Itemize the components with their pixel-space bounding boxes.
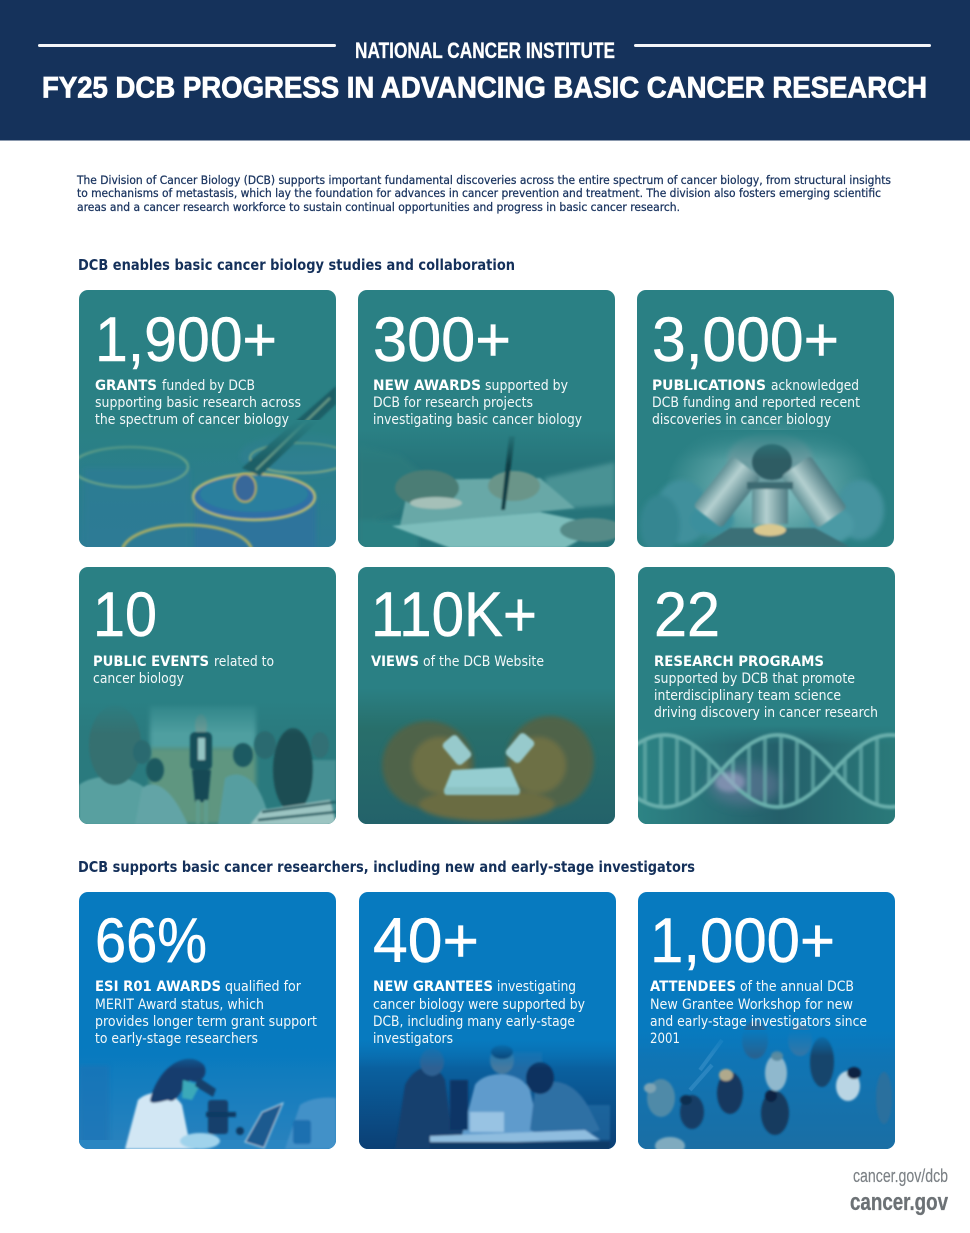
description: driving discovery in cancer research bbox=[654, 705, 878, 721]
description: PUBLICATIONS bbox=[652, 378, 766, 394]
description: to early-stage researchers bbox=[95, 1031, 258, 1047]
card background bbox=[637, 290, 894, 547]
description: NEW AWARDS bbox=[373, 378, 481, 394]
description: GRANTS bbox=[95, 378, 157, 394]
card background bbox=[79, 567, 336, 824]
photo: pipette and test tubes bbox=[79, 386, 336, 547]
panel: public events bbox=[79, 567, 336, 825]
stat number: 40+ bbox=[373, 906, 479, 976]
description: discoveries in cancer biology bbox=[652, 412, 831, 428]
description: acknowledged bbox=[771, 378, 859, 394]
description: supporting basic research across bbox=[95, 395, 301, 411]
stat number: 300+ bbox=[373, 305, 511, 375]
description: qualified for bbox=[225, 979, 301, 995]
panel: new awards bbox=[358, 290, 624, 550]
stat number: 110K+ bbox=[371, 580, 537, 650]
card background bbox=[358, 567, 615, 824]
card background bbox=[358, 290, 615, 547]
description bbox=[95, 979, 318, 1047]
description: provides longer term grant support bbox=[95, 1014, 318, 1030]
stat number: 10 bbox=[93, 580, 157, 650]
description: 2001 bbox=[650, 1031, 680, 1047]
card background bbox=[79, 290, 336, 547]
description: PUBLIC EVENTS bbox=[93, 654, 209, 670]
panel: website views bbox=[358, 567, 615, 824]
panel: research programs bbox=[638, 567, 895, 824]
panel: publications bbox=[637, 290, 894, 565]
card background bbox=[638, 567, 895, 824]
header rule right bbox=[634, 44, 931, 47]
card background bbox=[638, 892, 895, 1149]
description: cancer biology bbox=[93, 671, 184, 687]
footer links bbox=[850, 1166, 949, 1216]
organisation name: NATIONAL CANCER INSTITUTE bbox=[355, 38, 615, 63]
intro paragraph: The Division of Cancer Biology (DCB) supports important fundamental discoveries across the entire spectrum of cancer biology, from structural insights bbox=[76, 174, 891, 187]
header banner bbox=[0, 0, 970, 140]
description bbox=[93, 654, 274, 687]
section heading: researchers: DCB supports basic cancer researchers, including new and early-stage investigators bbox=[78, 858, 695, 876]
stat number: 1,900+ bbox=[95, 305, 277, 375]
description: DCB, including many early-stage bbox=[373, 1014, 575, 1030]
intro paragraph: to mechanisms of metastasis, which lay the foundation for advances in cancer prevention and treatment. The division also fosters emerging scientific bbox=[77, 187, 881, 200]
description: ATTENDEES bbox=[650, 979, 736, 995]
description: supported by bbox=[485, 378, 568, 394]
description: ESI R01 AWARDS bbox=[95, 979, 221, 995]
photo: researcher at a microscope bbox=[79, 1058, 336, 1149]
stat number: 1,000+ bbox=[650, 906, 835, 976]
section heading: studies and collaboration: DCB enables basic cancer biology studies and collaboration bbox=[78, 256, 515, 274]
intro paragraph: areas and a cancer research workforce to sustain continual opportunities and progress in basic cancer research. bbox=[77, 201, 680, 214]
photo: attendees from above bbox=[638, 1021, 895, 1155]
photo: audience and speaker bbox=[79, 700, 336, 825]
description: DCB funding and reported recent bbox=[652, 395, 861, 411]
description: DCB for research projects bbox=[373, 395, 533, 411]
description: investigators bbox=[373, 1031, 453, 1047]
photo: DNA helix bbox=[638, 730, 895, 824]
description: MERIT Award status, which bbox=[95, 997, 264, 1013]
intro paragraph bbox=[76, 174, 891, 214]
description bbox=[654, 654, 878, 721]
panel: ESI R01 awards bbox=[79, 892, 336, 1149]
description: the spectrum of cancer biology bbox=[95, 412, 289, 428]
description bbox=[650, 979, 867, 1047]
description bbox=[371, 654, 544, 670]
photo: hands signing a document bbox=[358, 436, 615, 547]
description bbox=[652, 378, 861, 428]
description bbox=[95, 378, 301, 428]
description bbox=[373, 378, 582, 428]
panel: attendees bbox=[638, 892, 895, 1155]
stat number: 3,000+ bbox=[652, 305, 839, 375]
description: of the DCB Website bbox=[423, 654, 544, 670]
description: investigating bbox=[497, 979, 576, 995]
photo: hands holding a phone bbox=[358, 688, 615, 824]
description: funded by DCB bbox=[162, 378, 255, 394]
description: VIEWS bbox=[371, 654, 419, 670]
panel: grants bbox=[79, 290, 336, 547]
stat number: 66% bbox=[95, 906, 207, 976]
description: related to bbox=[214, 654, 274, 670]
description: and early-stage investigators since bbox=[650, 1014, 867, 1030]
stat number: 22 bbox=[654, 580, 720, 650]
description: interdisciplinary team science bbox=[654, 688, 841, 704]
photo: researchers around a lit table bbox=[359, 1040, 616, 1149]
description bbox=[373, 979, 585, 1047]
panel: new grantees bbox=[359, 892, 616, 1149]
description: supported by DCB that promote bbox=[654, 671, 855, 687]
card background bbox=[79, 892, 336, 1149]
description: cancer biology were supported by bbox=[373, 997, 585, 1013]
description: NEW GRANTEES bbox=[373, 979, 493, 995]
description: of the annual DCB bbox=[740, 979, 854, 995]
photo: microscope bbox=[641, 421, 885, 547]
header rule left bbox=[38, 44, 336, 47]
description: New Grantee Workshop for new bbox=[650, 997, 853, 1013]
description: RESEARCH PROGRAMS bbox=[654, 654, 824, 670]
description: investigating basic cancer biology bbox=[373, 412, 582, 428]
card background bbox=[359, 892, 616, 1149]
